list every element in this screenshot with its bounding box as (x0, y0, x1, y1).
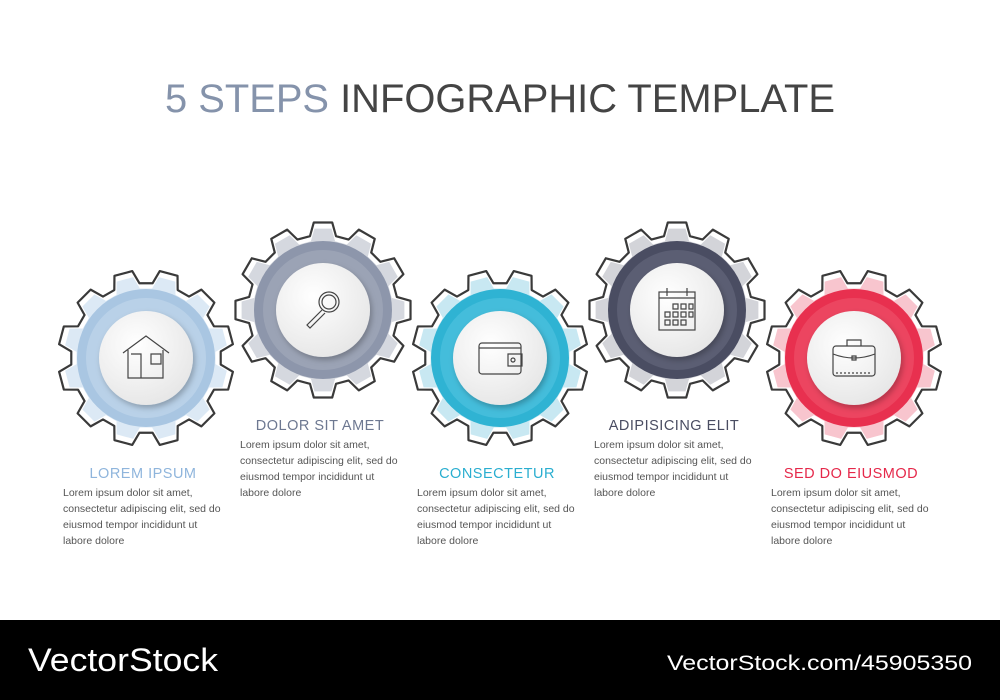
footer bar (0, 620, 1000, 700)
step 4 gear (589, 222, 765, 398)
step 4 text: Lorem ipsum dolor sit amet, (594, 439, 724, 451)
step 3 text: Lorem ipsum dolor sit amet, (417, 487, 547, 499)
step 3 text: labore dolore (417, 535, 478, 547)
step 4 text (594, 418, 752, 499)
step 2 text: labore dolore (240, 487, 301, 499)
step 5 text: eiusmod tempor incididunt ut (771, 519, 905, 531)
title: 5 STEPS INFOGRAPHIC TEMPLATE (165, 77, 835, 121)
step 5 text: Lorem ipsum dolor sit amet, (771, 487, 901, 499)
step 5 text: labore dolore (771, 535, 832, 547)
step 1 text: labore dolore (63, 535, 124, 547)
icon: calendar (659, 288, 695, 330)
step 2 text: Lorem ipsum dolor sit amet, (240, 439, 370, 451)
step 3 text: consectetur adipiscing elit, sed do (417, 503, 575, 515)
step 2 text: consectetur adipiscing elit, sed do (240, 455, 398, 467)
icon: house (123, 336, 169, 378)
step 4 text: eiusmod tempor incididunt ut (594, 471, 728, 483)
step 2 text (240, 418, 398, 499)
icon: briefcase (833, 340, 875, 376)
step 2 text: DOLOR SIT AMET (256, 418, 384, 434)
step 1 text: LOREM IPSUM (89, 466, 197, 482)
step 5 text (771, 466, 929, 547)
icon: magnifier (307, 292, 339, 328)
icon: wallet (479, 343, 522, 374)
step 5 gear (747, 251, 961, 465)
step 3 text: CONSECTETUR (439, 466, 555, 482)
step 4 text: labore dolore (594, 487, 655, 499)
footer bar: VectorStock.com/45905350 (667, 652, 972, 675)
step 1 gear (39, 251, 253, 465)
step 3 text (417, 466, 575, 547)
step 3 gear (393, 251, 607, 465)
step 4 text: consectetur adipiscing elit, sed do (594, 455, 752, 467)
step 1 text (63, 466, 221, 547)
footer bar: VectorStock (28, 642, 219, 678)
step 5 text: consectetur adipiscing elit, sed do (771, 503, 929, 515)
step 2 gear (235, 222, 411, 398)
step 5 text: SED DO EIUSMOD (784, 466, 918, 482)
step 2 text: eiusmod tempor incididunt ut (240, 471, 374, 483)
step 1 text: eiusmod tempor incididunt ut (63, 519, 197, 531)
step 4 text: ADIPISICING ELIT (609, 418, 739, 434)
step 1 text: consectetur adipiscing elit, sed do (63, 503, 221, 515)
step 1 text: Lorem ipsum dolor sit amet, (63, 487, 193, 499)
step 3 text: eiusmod tempor incididunt ut (417, 519, 551, 531)
